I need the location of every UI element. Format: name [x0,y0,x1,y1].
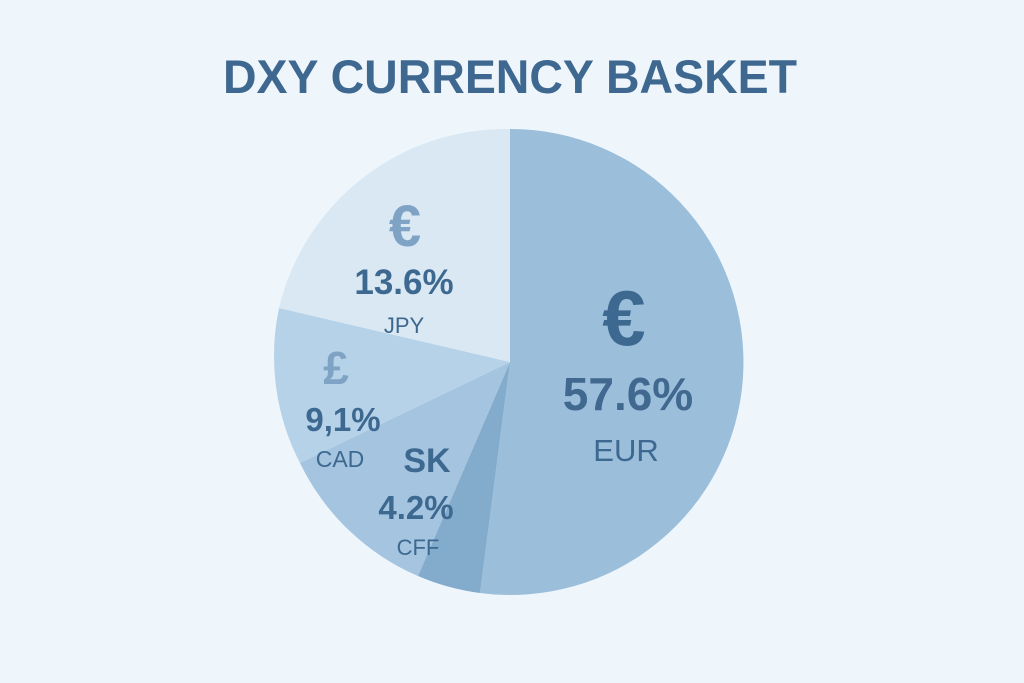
label: CAD: CAD [316,446,364,472]
label: EUR [563,274,693,468]
title: DXY CURRENCY BASKET [223,50,797,103]
icon: euro: € [602,274,646,362]
label: CFF: CFF [397,535,439,560]
label: CFF: 4.2% [378,489,454,526]
pie chart [274,129,743,595]
icon: euro small: € [389,194,421,259]
label: JPY: 13.6% [354,263,454,302]
label: CFF [378,442,454,560]
label: JPY: JPY [384,313,424,338]
label: JPY [354,194,454,338]
label: EUR: EUR [593,433,659,468]
label: CFF: SK [403,442,451,480]
slice: CAD [274,308,510,463]
slice: EUR [480,129,743,595]
icon: pound: £ [323,342,349,394]
slice: JPY [279,129,510,362]
slice: SK / CFF [300,362,510,576]
slice: dark small [418,362,510,593]
label: EUR: 57.6% [563,368,693,420]
label: CAD [305,342,381,472]
label: CAD: 9,1% [305,401,381,438]
